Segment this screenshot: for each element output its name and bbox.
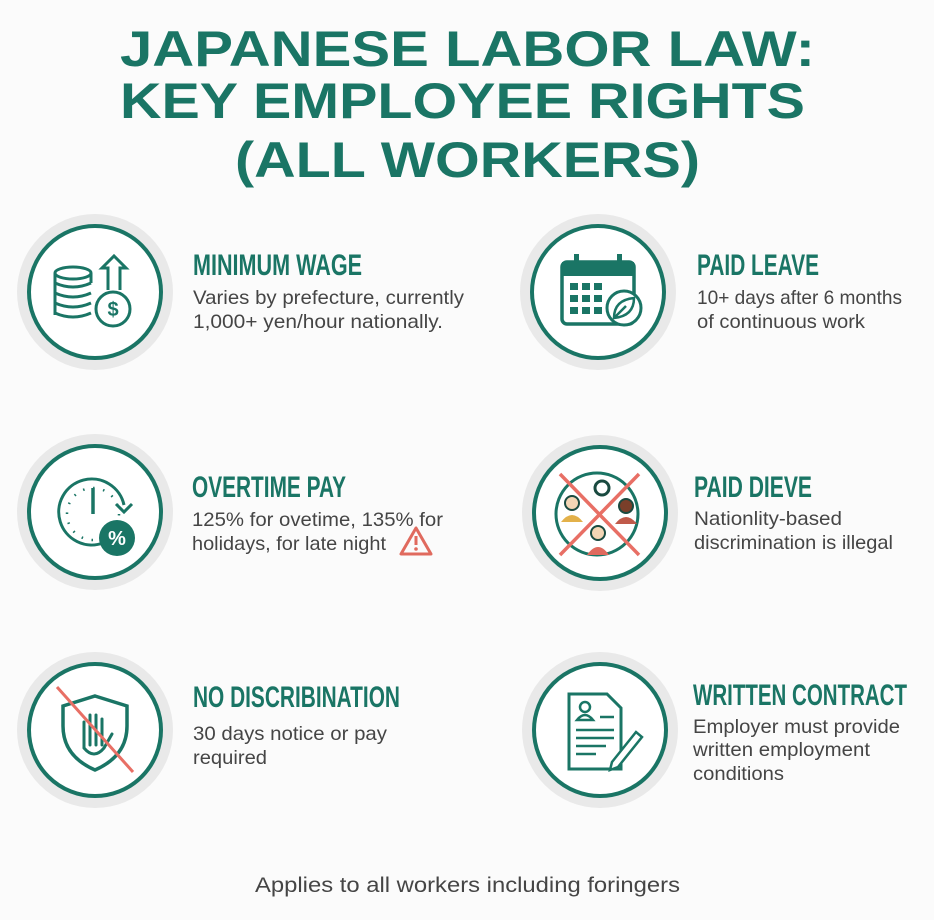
icon: people crossed (522, 435, 678, 591)
heading: NO DISCRIBINATION (193, 681, 400, 714)
text block: Employer must provide (693, 716, 900, 738)
text block (192, 509, 444, 555)
panel: paid dieve (nationality) (522, 435, 893, 591)
title: (ALL WORKERS) (235, 132, 700, 188)
text block: discrimination is illegal (694, 532, 893, 554)
icon: shield hand crossed (17, 652, 173, 808)
panel: overtime pay (17, 434, 444, 590)
heading: MINIMUM WAGE (193, 249, 362, 282)
icon: clock with percent (17, 434, 173, 590)
heading: PAID DIEVE (694, 471, 812, 504)
text block (193, 723, 387, 769)
icon: warning (401, 528, 431, 554)
text block: required (193, 747, 267, 769)
icon: coins and dollar (17, 214, 173, 370)
text block: 30 days notice or pay (193, 723, 387, 745)
icon: coins and dollar: $ (107, 299, 119, 321)
text block (692, 716, 900, 785)
panel: paid leave (520, 214, 902, 370)
panel: written contract (522, 652, 907, 808)
text block: Nationlity-based (694, 508, 842, 530)
text block (697, 287, 902, 333)
text block: 10+ days after 6 months (697, 287, 902, 309)
text block: 1,000+ yen/hour nationally. (193, 311, 443, 333)
title (120, 21, 815, 188)
panel: minimum wage (17, 214, 464, 370)
text block: written employment (692, 739, 871, 761)
text block: Varies by prefecture, currently (193, 287, 464, 309)
icon: clock with percent: % (108, 528, 126, 550)
text block: holidays, for late night (192, 533, 387, 555)
text block: of continuous work (697, 311, 865, 333)
icon: document with pen (522, 652, 678, 808)
title: JAPANESE LABOR LAW: (120, 21, 815, 77)
heading: PAID LEAVE (697, 249, 819, 282)
text block (193, 287, 464, 333)
footer note: Applies to all workers including foringers (255, 874, 680, 897)
text block (694, 508, 893, 554)
icon: calendar with leaf (520, 214, 676, 370)
title: KEY EMPLOYEE RIGHTS (120, 73, 805, 129)
text block: conditions (693, 763, 784, 785)
heading: OVERTIME PAY (192, 471, 346, 504)
text block: 125% for ovetime, 135% for (192, 509, 444, 531)
panel: no discribination (17, 652, 400, 808)
